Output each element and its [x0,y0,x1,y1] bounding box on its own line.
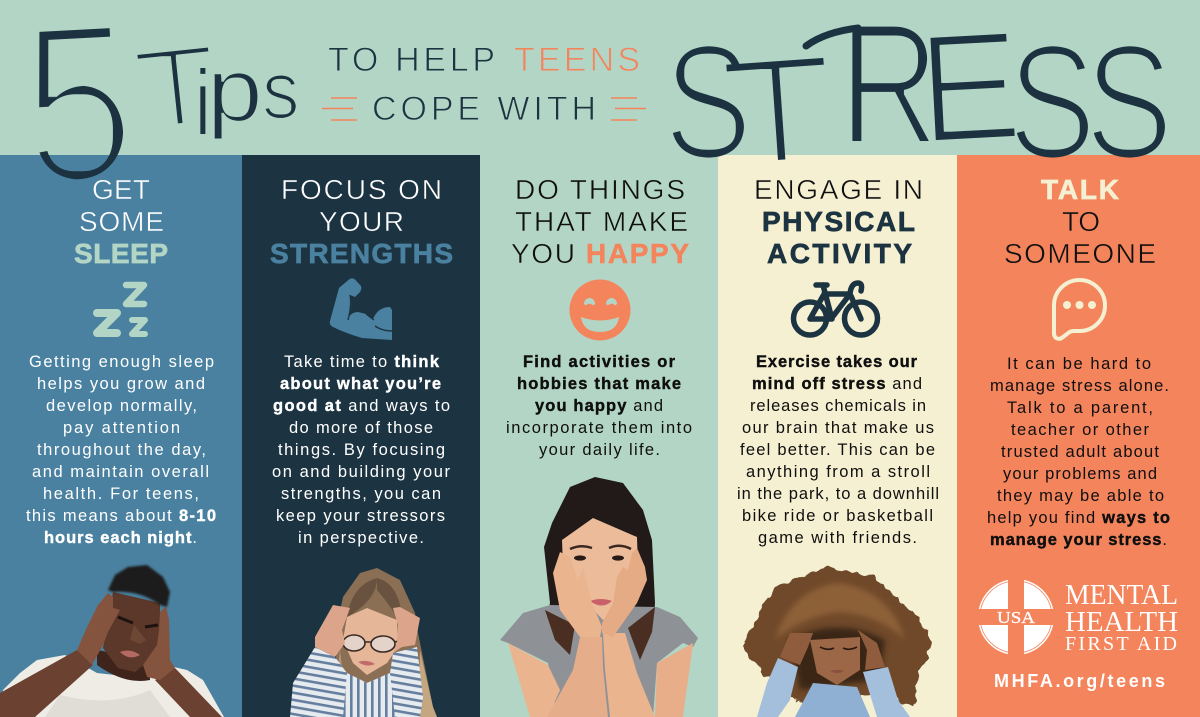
body text: physical activity: mind off stress and [752,375,922,393]
heading: get some sleep: SOME [79,206,164,237]
logo: mental health first aid usa: HEALTH [1065,606,1178,638]
body text: strengths: keep your stressors [276,507,445,525]
heading: talk to someone: TALK [1041,174,1119,205]
body text: strengths: on and building your [272,463,450,481]
heading: engage in physical activity [754,174,923,269]
heading: engage in physical activity: ACTIVITY [767,238,912,269]
title: stress [664,0,1173,198]
body text: physical activity: game with friends. [758,529,917,547]
body text: strengths: Take time to think [284,353,440,371]
body text: physical activity [737,353,939,547]
heading: talk to someone: TO [1062,206,1100,237]
title: 5 tips: T [127,20,226,154]
body text: sleep: throughout the day, [37,441,206,459]
photo: woman with curly hair [743,567,933,717]
heading: get some sleep: GET [92,174,150,205]
body text: strengths: things. By focusing [278,441,445,459]
panel: engage in physical activity [718,155,957,717]
body text: happy: hobbies that make [517,375,681,393]
body text: physical activity: our brain that make us [742,419,934,437]
panel: get some sleep [0,155,242,717]
body text: strengths: do more of those [289,419,433,437]
body text: talk: It can be hard to [1007,355,1151,373]
logo: mental health first aid usa: MENTAL [1065,579,1178,611]
body text: sleep: develop normally, [46,397,197,415]
heading: engage in physical activity: PHYSICAL [762,206,915,237]
body text: happy [506,353,692,459]
body text: sleep [26,353,216,547]
body text: physical activity: feel better. This can be [740,441,935,459]
body text: talk: help you find ways to [987,509,1170,527]
body text: physical activity: bike ride or basketball [742,507,933,525]
body text: strengths: good at and ways to [273,397,450,415]
body text: sleep: helps you grow and [37,375,205,393]
heading: do things that make you happy: YOU HAPPY [511,238,689,269]
icon: smiley face [570,280,630,340]
heading: do things that make you happy: THAT MAKE [515,206,688,237]
subtitle: to help teens cope with: TEENS [514,41,640,79]
logo: mental health first aid usa [978,579,1178,655]
body text: strengths: about what you’re [280,375,441,393]
heading: engage in physical activity: ENGAGE IN [754,174,923,205]
body text: talk: manage stress alone. [990,377,1169,395]
title: stress: S [664,12,752,193]
heading: focus on your strengths [270,174,453,269]
body text: talk [987,355,1170,549]
body text: physical activity: releases chemicals in [750,397,926,415]
body text: sleep: pay attention [63,419,180,437]
title: stress: S [1085,12,1173,193]
body text: talk: trusted adult about [1001,443,1159,461]
photo: worried woman holding face [500,477,698,717]
body text: strengths: in perspective. [298,529,424,547]
photo: stressed young man [0,565,224,717]
body text: talk: your problems and [1003,465,1157,483]
subtitle: to help teens cope with: COPE WITH [372,90,596,128]
body text: sleep: health. For teens, [43,485,199,503]
title: stress: S [1008,12,1096,193]
body text: sleep: hours each night. [44,529,197,547]
panel: focus on your strengths [242,155,480,717]
url: mhfa.org/teens: MHFA.org/teens [994,671,1165,691]
body text: talk: Talk to a parent, [1007,399,1153,417]
title: 5 tips [16,0,299,233]
title: stress: E [913,0,1026,177]
body text: sleep: and maintain overall [32,463,209,481]
body text: talk: manage your stress. [990,531,1167,549]
subtitle: to help teens cope with [322,41,646,128]
logo: mental health first aid usa: USA [997,608,1036,627]
icon: bicycle [794,283,878,335]
subtitle: to help teens cope with: TO HELP [328,41,495,79]
body text: happy: incorporate them into [506,419,692,437]
body text: talk: teacher or other [1011,421,1150,439]
logo: mental health first aid usa: FIRST AID [1065,633,1177,655]
photo: woman with glasses [290,568,437,717]
icon: sleeping z letters [97,285,145,334]
heading: focus on your strengths: FOCUS ON [281,174,442,205]
heading: talk to someone: SOMEONE [1004,238,1156,269]
icon: speech bubble [1054,280,1105,339]
heading: talk to someone [1004,174,1156,269]
body text: talk: they may be able to [997,487,1164,505]
heading: focus on your strengths: STRENGTHS [270,238,453,269]
heading: focus on your strengths: YOUR [319,206,404,237]
heading: get some sleep [74,174,168,269]
title: 5 tips: i [194,51,212,155]
body text: sleep: this means about 8-10 [26,507,216,525]
body text: happy: your daily life. [539,441,660,459]
heading: do things that make you happy [511,174,689,269]
body text: physical activity: Exercise takes our [756,353,918,371]
body text: happy: Find activities or [523,353,676,371]
heading: get some sleep: SLEEP [74,238,168,269]
heading: do things that make you happy: DO THINGS [515,174,685,205]
icon: flexed arm [330,278,392,340]
title: 5 tips: p [207,41,263,141]
title: 5 tips: s [262,44,299,136]
panel: talk to someone [957,155,1200,717]
body text: physical activity: anything from a stroll [746,463,930,481]
body text: strengths [272,353,450,547]
panel: do things that make you happy [500,180,698,717]
body text: sleep: Getting enough sleep [29,353,214,371]
title: stress: T [715,23,842,198]
body text: physical activity: in the park, to a downhill [737,485,939,503]
body text: happy: you happy and [535,397,663,415]
body text: strengths: strengths, you can [281,485,441,503]
